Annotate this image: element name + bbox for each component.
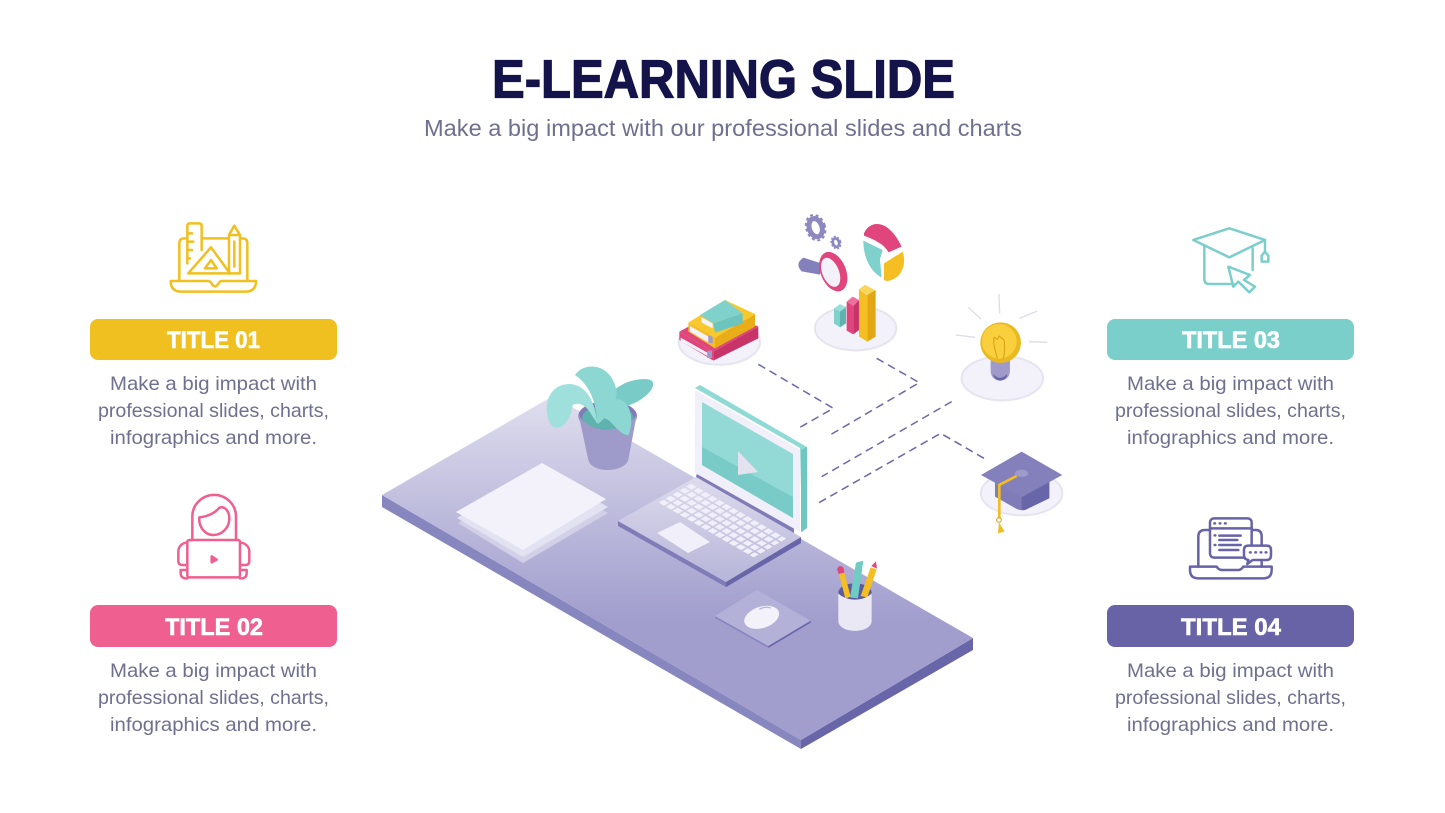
keyboard (661, 485, 784, 556)
description 03: Make a big impact with (1127, 373, 1334, 395)
desk illustration (382, 366, 973, 749)
desk top (382, 396, 973, 740)
laptop base (618, 521, 801, 587)
label bar 01 (90, 319, 337, 360)
description 03: professional slides, charts, (1115, 400, 1346, 422)
right leaf (603, 379, 653, 408)
pen cup (837, 561, 877, 631)
panel: title 03 (1107, 228, 1354, 449)
icon: small gear (830, 235, 842, 250)
front leaf (597, 399, 631, 435)
icon: graduation cap and cursor (1193, 228, 1268, 292)
desk right side (801, 638, 973, 749)
description 03: infographics and more. (1127, 427, 1334, 449)
icon: play button (738, 451, 758, 475)
panel: title 04 (1107, 518, 1354, 736)
screen display (702, 402, 793, 518)
description 01 (98, 373, 329, 449)
icon: student with laptop (178, 495, 249, 578)
left leaf (547, 384, 597, 428)
label 02: TITLE 02 (165, 614, 263, 641)
icon: light bulb (956, 294, 1047, 400)
label 03: TITLE 03 (1182, 327, 1280, 354)
teal book (702, 317, 713, 328)
description 04: Make a big impact with (1127, 660, 1334, 682)
label 04: TITLE 04 (1181, 614, 1282, 641)
description 02: infographics and more. (110, 714, 317, 736)
description 02: Make a big impact with (110, 660, 317, 682)
description 04: professional slides, charts, (1115, 687, 1346, 709)
screen back edge (695, 385, 807, 532)
icon: laptop with drawing tools (171, 223, 256, 292)
yellow book (688, 323, 715, 348)
icon: large gear (803, 212, 829, 243)
description 04: infographics and more. (1127, 714, 1334, 736)
panel: title 01 (90, 223, 337, 449)
title: E-LEARNING SLIDE (492, 50, 955, 110)
description 04 (1115, 660, 1346, 736)
desk left side (382, 495, 801, 749)
laptop (618, 385, 807, 587)
mouse pad and mouse (715, 590, 811, 648)
label 01: TITLE 01 (167, 327, 260, 354)
screen frame (695, 390, 800, 532)
description 02 (98, 660, 329, 736)
dashed connector lines (758, 358, 984, 505)
panel: title 02 (90, 495, 337, 736)
icon: graduation cap (981, 452, 1062, 533)
plant (547, 366, 653, 470)
hinge (696, 473, 794, 533)
papers (456, 463, 608, 563)
icon: analytics chart group (798, 212, 904, 350)
icon: magnifying glass (798, 248, 853, 296)
icon: laptop with online course window (1190, 518, 1272, 578)
description 01: infographics and more. (110, 427, 317, 449)
pie chart (863, 224, 904, 281)
label bar 03 (1107, 319, 1354, 360)
red book (679, 332, 713, 361)
label bar 02 (90, 605, 337, 647)
icon: stack of books (679, 300, 760, 365)
description 03 (1115, 373, 1346, 449)
pot body (578, 413, 637, 470)
top leaf (575, 366, 617, 424)
subtitle: Make a big impact with our professional slides and charts (424, 115, 1022, 141)
description 01: professional slides, charts, (98, 400, 329, 422)
description 01: Make a big impact with (110, 373, 317, 395)
description 02: professional slides, charts, (98, 687, 329, 709)
label bar 04 (1107, 605, 1354, 647)
bar chart (834, 285, 876, 342)
trackpad (657, 522, 710, 553)
